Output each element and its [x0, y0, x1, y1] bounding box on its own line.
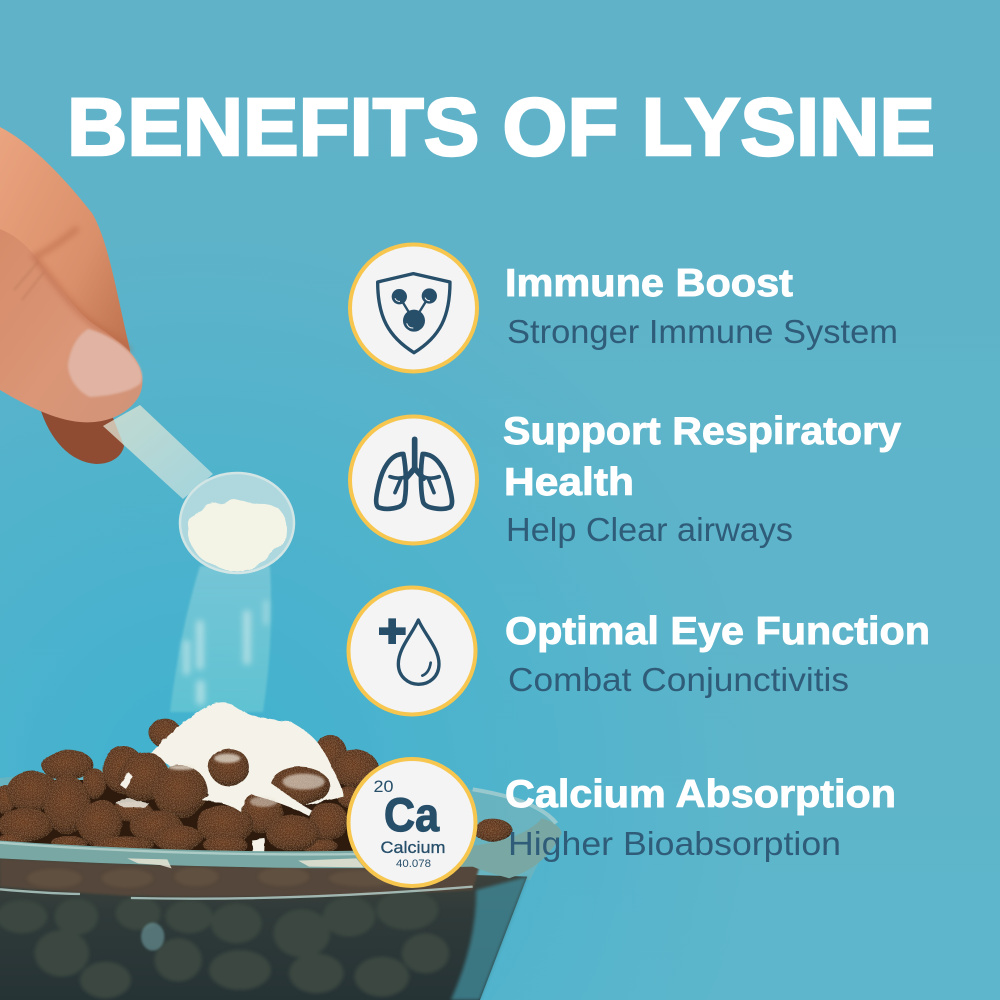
right glass edge	[451, 877, 527, 1000]
icon: lungs	[350, 416, 477, 544]
hand	[0, 127, 142, 422]
lower finger	[40, 408, 124, 464]
bowl body	[0, 857, 527, 1000]
title: BENEFITS OF LYSINE	[67, 82, 935, 173]
icon: calcium element tile: 40.078	[396, 858, 431, 870]
icon: calcium element tile: Ca	[384, 788, 440, 841]
rim hot spots	[127, 858, 364, 868]
knuckle wrinkles	[14, 262, 44, 300]
back rim highlight	[473, 789, 556, 823]
index finger	[0, 127, 130, 375]
powder patches	[115, 772, 312, 853]
rim highlight	[0, 843, 473, 899]
measuring scoop	[103, 405, 294, 573]
front kibble	[0, 746, 348, 855]
heading: Immune Boost	[505, 262, 793, 305]
reflected kibble	[27, 867, 398, 888]
glass bowl	[0, 789, 562, 1000]
scoop bowl	[180, 473, 294, 573]
description: Combat Conjunctivitis	[508, 661, 849, 698]
submerged kibble	[0, 890, 449, 998]
description: Higher Bioabsorption	[508, 825, 841, 862]
icon: calcium element tile: Calcium	[380, 838, 446, 857]
icon: calcium element tile	[348, 759, 476, 886]
heading: Support Respiratory	[503, 410, 901, 453]
front rim band	[0, 818, 562, 878]
heading line 2: Health	[504, 461, 634, 504]
benefit: respiratory health	[350, 410, 901, 548]
icon: plus and drop	[348, 588, 476, 714]
powder in glass	[141, 923, 164, 951]
benefit: eye function	[348, 588, 930, 714]
description: Stronger Immune System	[507, 313, 898, 350]
reflected kibble band	[0, 858, 480, 897]
powder stream	[170, 566, 271, 712]
powder dusting	[169, 754, 325, 807]
benefit: immune boost	[350, 244, 898, 372]
heading: Calcium Absorption	[505, 773, 896, 816]
thumbnail	[68, 329, 142, 397]
kibble and powder pile	[0, 702, 512, 855]
thumb	[0, 229, 142, 422]
icon: calcium element tile: 20	[374, 777, 394, 796]
benefit: calcium absorption	[348, 759, 896, 886]
icon: shield with molecule	[350, 244, 477, 372]
back kibble	[0, 719, 512, 841]
pile base	[0, 780, 364, 853]
powder mound	[151, 702, 344, 805]
glass bowl back rim	[0, 766, 557, 880]
heading: Optimal Eye Function	[505, 610, 930, 653]
scoop handle	[103, 405, 213, 499]
powder in scoop	[188, 500, 286, 570]
shadow along thumb	[33, 228, 130, 352]
description: Help Clear airways	[506, 511, 793, 548]
